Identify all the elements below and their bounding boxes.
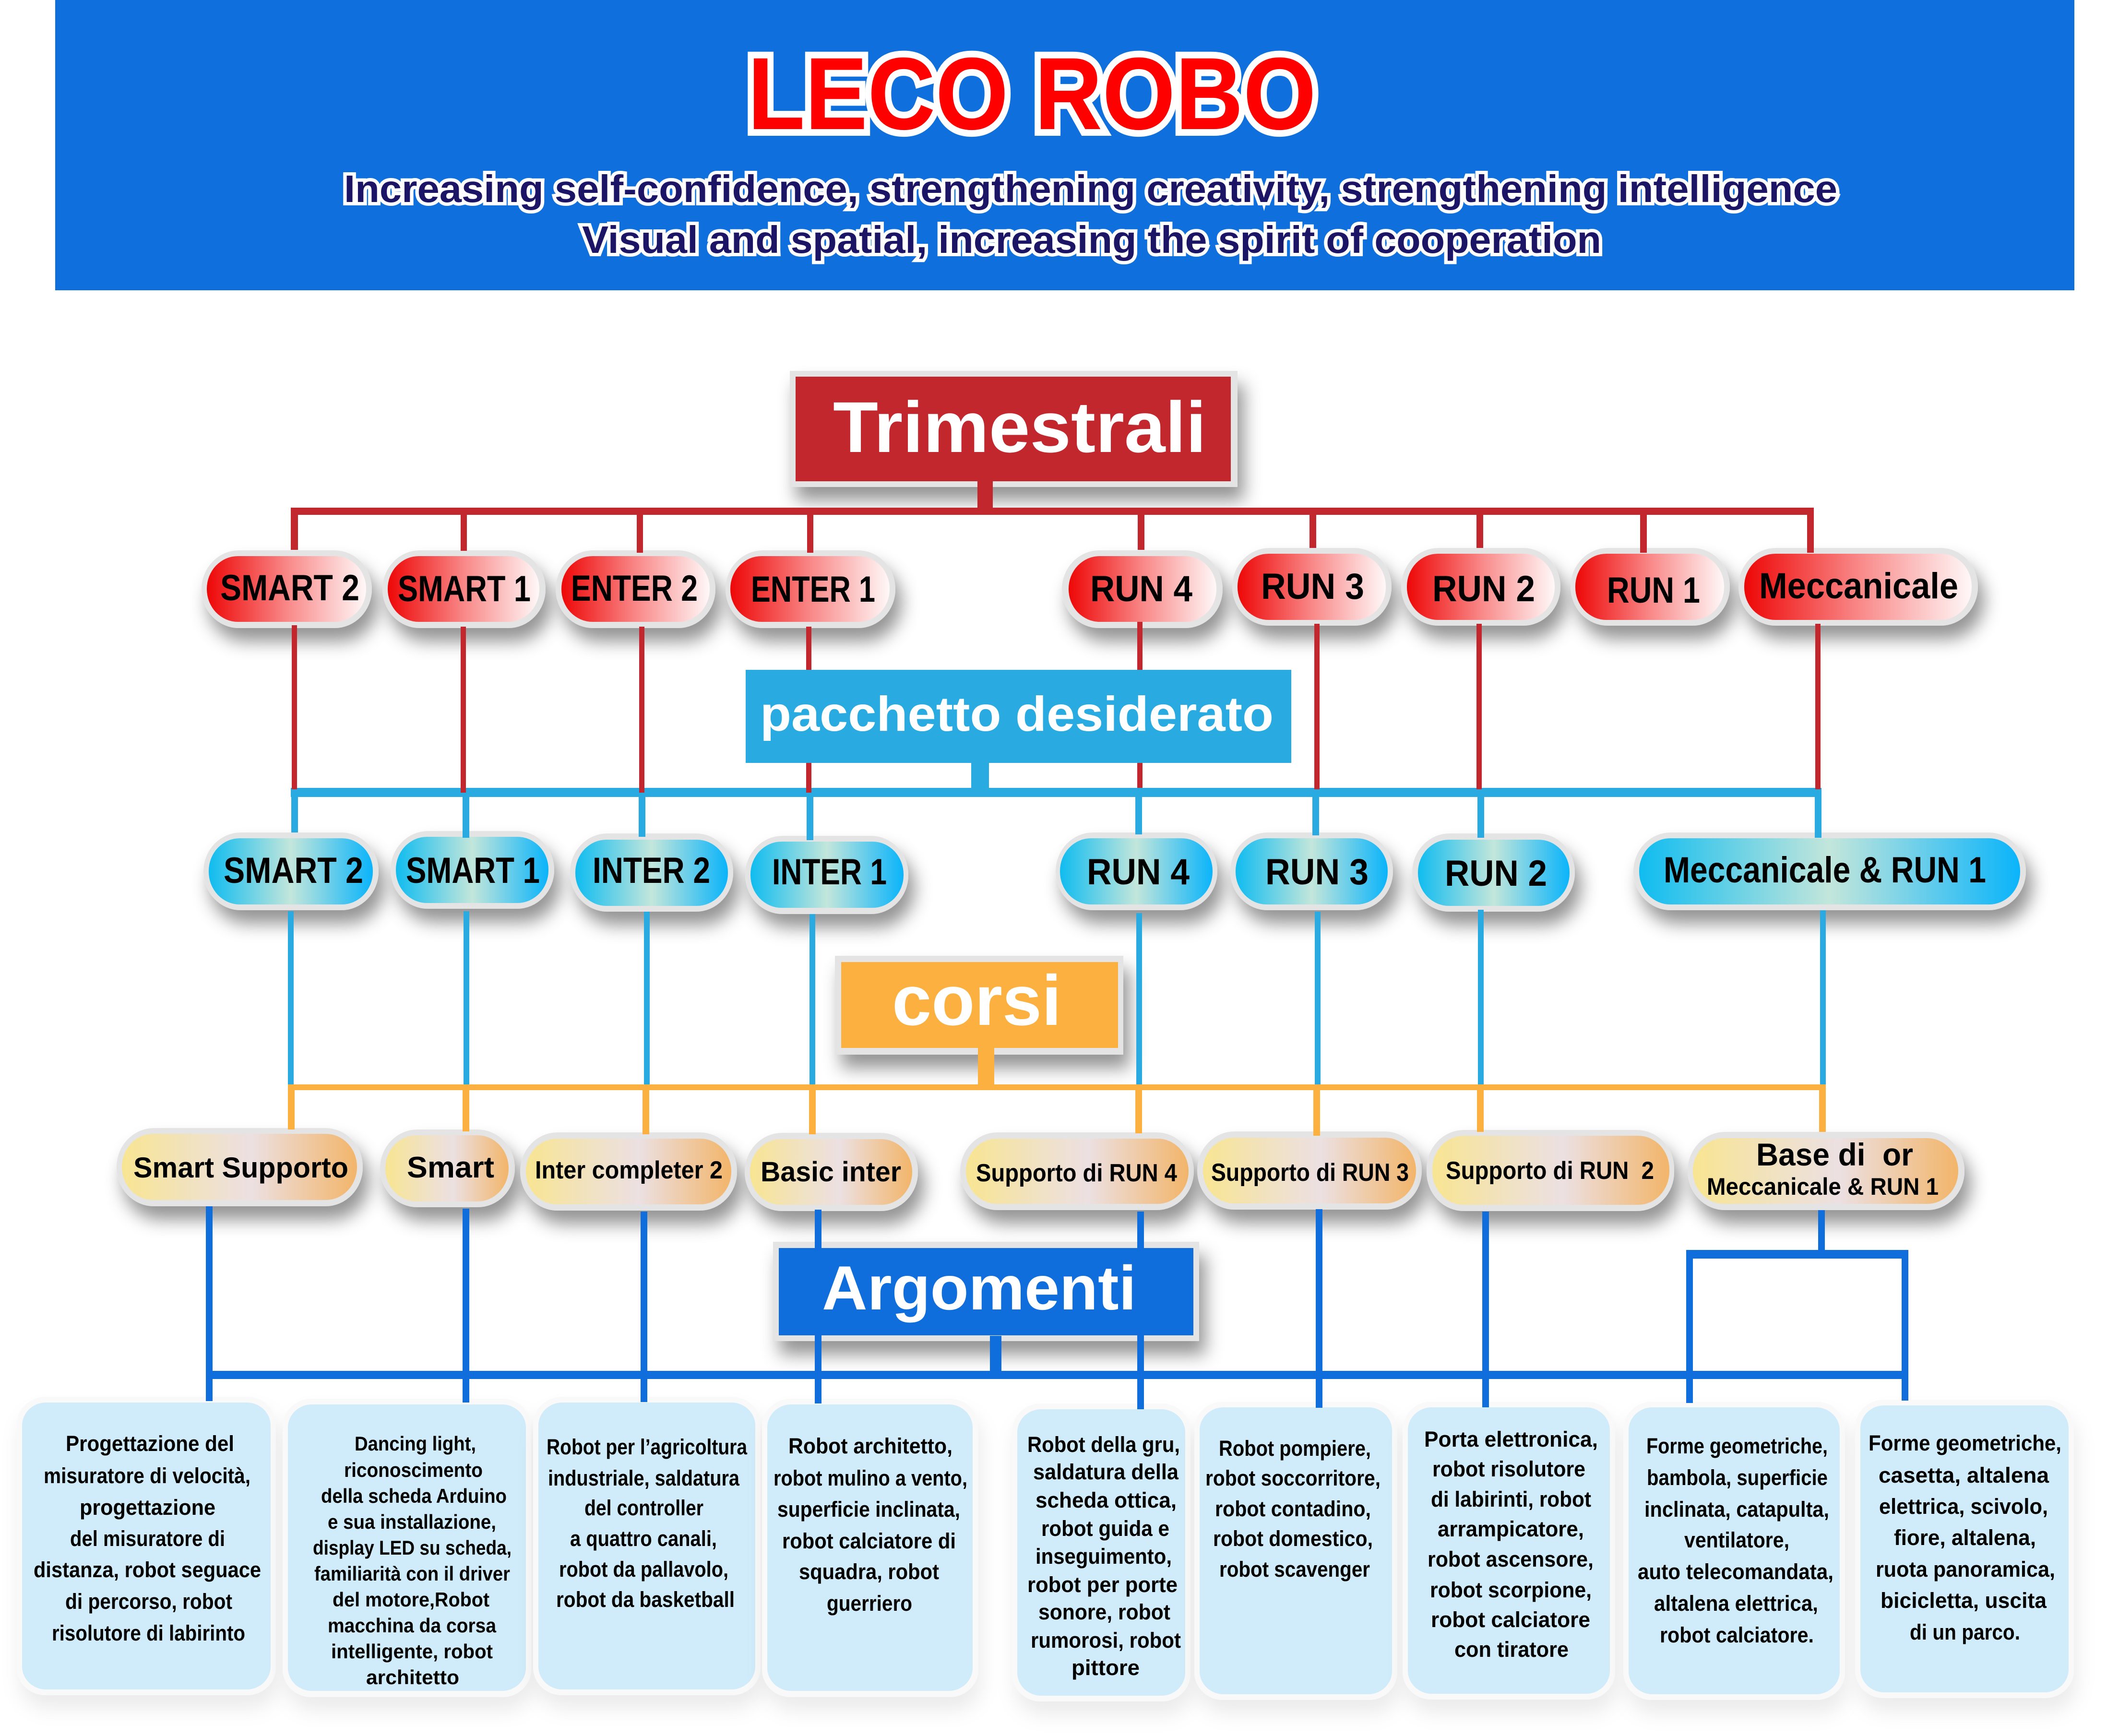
pill: SMART 2: SMART 2 xyxy=(220,568,359,608)
card 5 xyxy=(1012,1403,1190,1701)
pill: Inter completer 2: Inter completer 2 xyxy=(535,1156,723,1184)
cyan connector bar xyxy=(291,763,1821,797)
red connectors xyxy=(291,481,1814,553)
card 8: altalena elettrica, xyxy=(1654,1591,1818,1616)
card 5: rumorosi, robot xyxy=(1031,1628,1181,1653)
card 8: inclinata, catapulta, xyxy=(1644,1497,1829,1522)
card 9: fiore, altalena, xyxy=(1894,1525,2036,1550)
heading: Argomenti xyxy=(779,1248,1193,1335)
card 9: casetta, altalena xyxy=(1879,1463,2049,1487)
card 2: del motore,Robot xyxy=(333,1588,489,1611)
pill: Supporto di RUN 2 xyxy=(1427,1130,1674,1211)
card 7: Porta elettronica, xyxy=(1424,1427,1598,1451)
card 2: display LED su scheda, xyxy=(313,1536,512,1559)
card 2: architetto xyxy=(366,1666,459,1688)
heading: pacchetto desiderato xyxy=(746,670,1291,763)
heading: pacchetto desiderato: pacchetto desiderato xyxy=(760,687,1274,741)
card 4: robot calciatore di xyxy=(782,1529,956,1553)
pill: Supporto di RUN 3: Supporto di RUN 3 xyxy=(1211,1159,1409,1187)
heading: corsi xyxy=(841,961,1118,1048)
pill: Base di or Meccanicale & RUN 1 xyxy=(1688,1132,1964,1210)
card 9: Forme geometriche, xyxy=(1869,1431,2061,1455)
pill: Inter completer 2 xyxy=(520,1132,737,1211)
card 3: robot da basketball xyxy=(556,1587,735,1612)
card 1: di percorso, robot xyxy=(65,1589,232,1614)
card 6 xyxy=(1194,1402,1397,1700)
red pill row xyxy=(202,548,1978,628)
card 4: guerriero xyxy=(827,1591,912,1616)
card 3: Robot per l’agricoltura xyxy=(547,1435,748,1459)
pill: ENTER 2: ENTER 2 xyxy=(571,568,698,609)
pill: Supporto di RUN 3 xyxy=(1197,1131,1422,1210)
card 4: Robot architetto, xyxy=(788,1434,952,1458)
card 9: bicicletta, uscita xyxy=(1881,1588,2047,1613)
pill: SMART 2 xyxy=(202,550,372,628)
card 8: ventilatore, xyxy=(1684,1528,1789,1552)
heading frame: Trimestrali xyxy=(790,371,1238,487)
card 3: industriale, saldatura xyxy=(548,1466,740,1490)
pill: Smart xyxy=(380,1130,515,1207)
pill: RUN 4 xyxy=(1062,550,1223,628)
card 1: risolutore di labirinto xyxy=(52,1621,245,1645)
pill: Smart Supporto xyxy=(117,1128,363,1206)
pill: Meccanicale xyxy=(1738,548,1978,626)
pill: RUN 2: RUN 2 xyxy=(1432,569,1535,609)
heading: Trimestrali: Trimestrali xyxy=(833,387,1206,467)
card 1: misuratore di velocità, xyxy=(44,1463,250,1488)
card 1 xyxy=(17,1397,276,1695)
card 5: pittore xyxy=(1071,1655,1140,1680)
card 7: con tiratore xyxy=(1454,1637,1569,1662)
red lines to cyan bar xyxy=(292,622,1821,793)
title: LECO ROBO: LECO ROBO xyxy=(748,36,1316,151)
subtitle line 1: Increasing self-confidence, strengthening creativity, strengthening intelligence xyxy=(344,167,1837,210)
pill: Supporto di RUN 4 xyxy=(960,1132,1194,1210)
card 8: robot calciatore. xyxy=(1660,1623,1814,1647)
card 2: riconoscimento xyxy=(344,1459,483,1481)
pill: SMART 2 xyxy=(203,832,379,910)
pill: SMART 1: SMART 1 xyxy=(406,850,540,891)
card 5: sonore, robot xyxy=(1038,1600,1170,1624)
pill: RUN 2 xyxy=(1401,548,1560,626)
card 8: bambola, superficie xyxy=(1647,1465,1828,1490)
card 9: elettrica, scivolo, xyxy=(1879,1494,2048,1519)
card 4: squadra, robot xyxy=(799,1559,939,1584)
card 2: macchina da corsa xyxy=(328,1614,497,1637)
card 3: a quattro canali, xyxy=(570,1526,717,1551)
pill: INTER 1 xyxy=(745,836,908,914)
header banner xyxy=(55,0,2074,290)
orange pill row xyxy=(117,1128,1964,1211)
pill: ENTER 1: ENTER 1 xyxy=(751,569,875,610)
pill: RUN 3 xyxy=(1232,548,1392,626)
pill: INTER 2: INTER 2 xyxy=(593,850,710,891)
card 5: saldatura della xyxy=(1033,1460,1179,1484)
pill: SMART 1 xyxy=(391,831,554,909)
heading frame: corsi xyxy=(835,956,1123,1055)
pill: RUN 4: RUN 4 xyxy=(1087,852,1190,892)
pill: Supporto di RUN 2: Supporto di RUN 2 xyxy=(1446,1157,1654,1185)
card 2: intelligente, robot xyxy=(331,1640,493,1663)
heading: corsi: corsi xyxy=(892,961,1061,1040)
pill: Meccanicale & RUN 1 xyxy=(1633,832,2026,910)
card 5: inseguimento, xyxy=(1036,1544,1172,1569)
card 4: superficie inclinata, xyxy=(777,1497,960,1522)
pill: RUN 3: RUN 3 xyxy=(1265,852,1369,892)
card 3 xyxy=(533,1397,761,1695)
card 2: familiarità con il driver xyxy=(314,1562,510,1585)
pill: RUN 3 xyxy=(1230,832,1393,910)
pale blue topic cards xyxy=(17,1397,2074,1701)
card 7: robot risolutore xyxy=(1432,1457,1585,1481)
card 5: robot guida e xyxy=(1041,1516,1169,1541)
card 1: progettazione xyxy=(80,1495,215,1520)
card 6: Robot pompiere, xyxy=(1219,1436,1371,1461)
card 7: robot calciatore xyxy=(1431,1607,1590,1632)
card 8 xyxy=(1623,1402,1845,1700)
pill: SMART 2: SMART 2 xyxy=(224,850,363,891)
heading: Argomenti: Argomenti xyxy=(822,1253,1136,1323)
card 6: robot domestico, xyxy=(1213,1526,1373,1551)
card 7: robot scorpione, xyxy=(1430,1578,1592,1602)
card 3: del controller xyxy=(584,1496,703,1520)
pill: INTER 1: INTER 1 xyxy=(772,852,887,892)
card 3: robot da pallavolo, xyxy=(559,1557,728,1581)
pill: RUN 4 xyxy=(1056,832,1217,910)
card 2: della scheda Arduino xyxy=(321,1485,507,1507)
card 2: Dancing light, xyxy=(355,1432,476,1455)
card 7: di labirinti, robot xyxy=(1431,1487,1591,1511)
orange connectors xyxy=(288,1048,1826,1136)
card 9 xyxy=(1855,1400,2074,1698)
card 9: ruota panoramica, xyxy=(1876,1557,2055,1581)
pill: Basic inter xyxy=(745,1133,918,1211)
pill: Base di or Meccanicale & RUN 1: Base di or xyxy=(1756,1137,1913,1172)
card 6: robot scavenger xyxy=(1219,1557,1370,1581)
card 6: robot soccorritore, xyxy=(1205,1466,1381,1490)
card 2 xyxy=(283,1399,531,1697)
card 6: robot contadino, xyxy=(1215,1497,1371,1521)
pill: Base di or Meccanicale & RUN 1: Meccanicale & RUN 1 xyxy=(1707,1173,1939,1200)
pill: Smart Supporto: Smart Supporto xyxy=(133,1152,348,1184)
pill: Supporto di RUN 4: Supporto di RUN 4 xyxy=(976,1159,1177,1187)
subtitle line 2: Visual and spatial, increasing the spirit of cooperation xyxy=(582,218,1601,261)
card 1: del misuratore di xyxy=(70,1526,225,1551)
card 7: robot ascensore, xyxy=(1428,1547,1594,1571)
card 9: di un parco. xyxy=(1910,1620,2020,1644)
card 5: Robot della gru, xyxy=(1027,1432,1180,1457)
card 4 xyxy=(762,1399,978,1697)
pill: ENTER 1 xyxy=(726,550,895,628)
card 1: distanza, robot seguace xyxy=(34,1558,261,1582)
pill: Basic inter: Basic inter xyxy=(761,1156,901,1188)
heading: Trimestrali xyxy=(796,377,1231,481)
pill: RUN 4: RUN 4 xyxy=(1090,569,1192,609)
pill: Meccanicale: Meccanicale xyxy=(1759,566,1958,606)
pill: RUN 1: RUN 1 xyxy=(1607,570,1700,611)
pill: SMART 1: SMART 1 xyxy=(398,569,531,609)
pill: Meccanicale & RUN 1: Meccanicale & RUN 1 xyxy=(1664,850,1986,891)
pill: SMART 1 xyxy=(382,550,546,628)
card 5: robot per porte xyxy=(1027,1572,1178,1597)
cyan drops to pills xyxy=(291,797,1821,840)
card 5: scheda ottica, xyxy=(1036,1488,1177,1512)
pill: ENTER 2 xyxy=(556,550,715,628)
card 2: e sua installazione, xyxy=(328,1510,496,1533)
pill: INTER 2 xyxy=(570,833,733,912)
heading frame: Argomenti xyxy=(773,1242,1199,1341)
card 8: Forme geometriche, xyxy=(1646,1434,1828,1458)
pill: RUN 3: RUN 3 xyxy=(1261,566,1364,607)
card 7 xyxy=(1403,1402,1615,1700)
pill: RUN 1 xyxy=(1571,548,1730,626)
blue connectors xyxy=(206,1206,1908,1409)
pill: RUN 2: RUN 2 xyxy=(1445,853,1547,894)
card 4: robot mulino a vento, xyxy=(774,1466,967,1490)
card 8: auto telecomandata, xyxy=(1638,1559,1833,1584)
cyan pill row xyxy=(203,831,2026,914)
pill: RUN 2 xyxy=(1412,833,1575,912)
card 7: arrampicatore, xyxy=(1438,1517,1584,1541)
pill: Smart: Smart xyxy=(407,1151,494,1184)
card 1: Progettazione del xyxy=(66,1431,234,1456)
cyan lines to orange bar xyxy=(288,910,1826,1086)
